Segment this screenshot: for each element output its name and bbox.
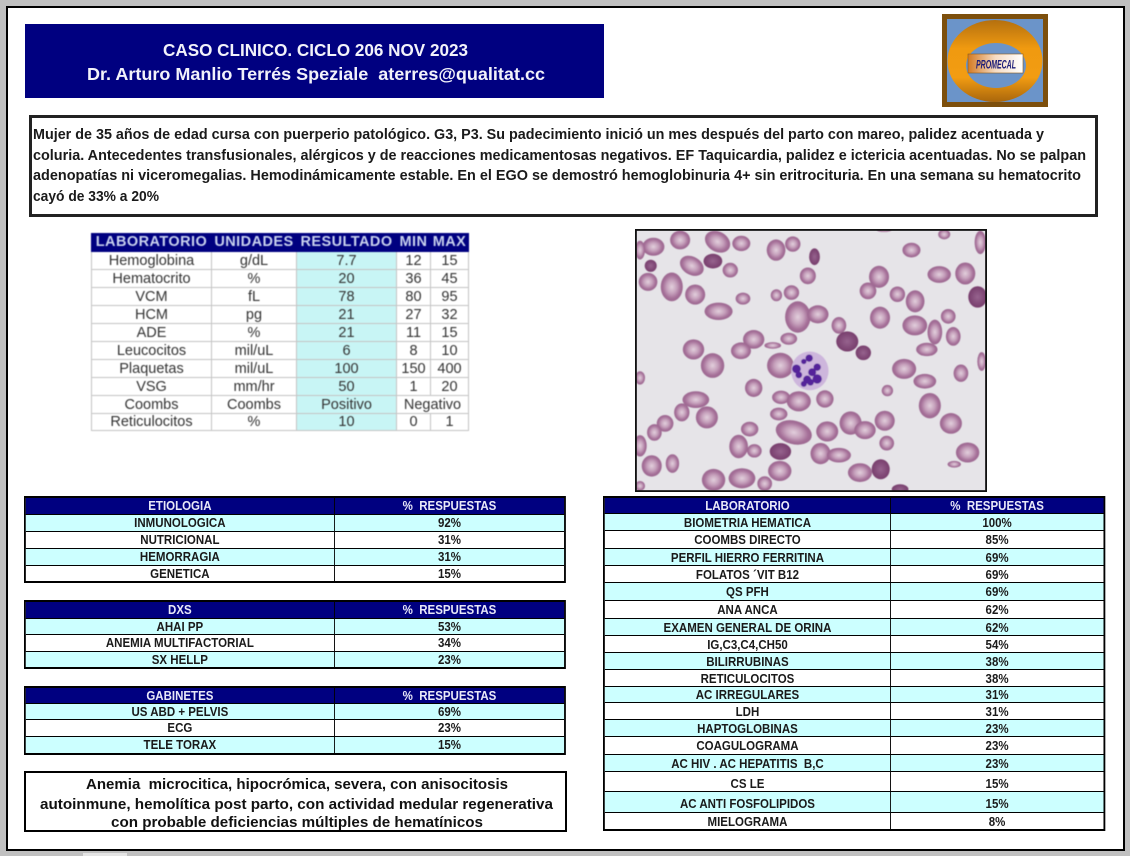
table: LABORATORIO responses: 15% [986,777,1009,791]
lab results table: Negativo [404,397,461,413]
table: GABINETES: % RESPUESTAS [403,689,496,703]
lab results table: 150 [401,361,426,377]
lab results table: 21 [338,307,355,323]
title banner: CASO CLINICO. CICLO 206 NOV 2023 [163,40,468,60]
table: LABORATORIO responses: 85% [986,533,1009,547]
table: ETIOLOGIA: 15% [438,567,461,581]
lab results table: UNIDADES [214,234,294,250]
table: DXS: % RESPUESTAS [403,603,496,617]
conclusion box: Anemia microcitica, hipocrómica, severa, con anisocitosis [86,776,508,793]
lab results table: 15 [441,325,458,341]
table: LABORATORIO responses: 38% [986,655,1009,669]
table: DXS: SX HELLP [152,653,208,667]
lab results table [90,232,470,432]
case description [29,115,1098,217]
lab results table: 20 [441,379,458,395]
lab results table: fL [248,289,260,305]
table: DXS: ANEMIA MULTIFACTORIAL [106,636,254,650]
table: DXS: 53% [438,620,461,634]
title banner: Dr. Arturo Manlio Terrés Speziale aterres@qualitat.cc [87,64,545,84]
table: LABORATORIO responses: LDH [736,705,759,719]
table: LABORATORIO responses: 31% [986,688,1009,702]
lab results table: 15 [441,253,458,269]
table: LABORATORIO responses: BIOMETRIA HEMATICA [684,516,811,530]
table: LABORATORIO responses: ANA ANCA [717,603,778,617]
conclusion box [24,771,567,832]
table: ETIOLOGIA: 31% [438,533,461,547]
table: LABORATORIO responses: % RESPUESTAS [950,499,1044,513]
lab results table: 45 [441,271,458,287]
lab results table: 50 [338,379,355,395]
lab results table: % [248,414,260,430]
lab results table: 10 [338,414,355,430]
table: LABORATORIO responses: PERFIL HIERRO FERRITINA [671,551,824,565]
icon: PROMECAL logo [942,14,1048,107]
lab results table: 7.7 [336,253,357,269]
lab results table: Reticulocitos [110,414,193,430]
lab results table: 100 [334,361,359,377]
table: LABORATORIO responses: QS PFH [726,585,769,599]
table: LABORATORIO responses: 8% [989,815,1005,829]
table: LABORATORIO responses: 69% [986,585,1009,599]
table: ETIOLOGIA: NUTRICIONAL [140,533,219,547]
table: LABORATORIO responses: 69% [986,568,1009,582]
blood smear micrograph [635,229,987,492]
lab results table: 6 [342,343,351,359]
lab results table: 12 [405,253,422,269]
lab results table: VCM [135,289,168,305]
table: DXS: 23% [438,653,461,667]
table: ETIOLOGIA: ETIOLOGIA [148,499,211,513]
table: LABORATORIO responses: 100% [982,516,1012,530]
icon: PROMECAL logo: PROMECAL [976,58,1016,72]
table: LABORATORIO responses: 69% [986,551,1009,565]
conclusion box: autoinmune, hemolítica post parto, con actividad medular regenerativa [40,796,554,813]
table: GABINETES: GABINETES [146,689,213,703]
neutrophil [791,351,829,390]
table: ETIOLOGIA: INMUNOLOGICA [134,516,226,530]
table: ETIOLOGIA: % RESPUESTAS [403,499,496,513]
lab results table: Positivo [321,397,372,413]
lab results table: 1 [445,414,454,430]
lab results table: mm/hr [233,379,275,395]
table: ETIOLOGIA: GENETICA [150,567,210,581]
table: LABORATORIO responses: RETICULOCITOS [701,672,794,686]
table: GABINETES: 69% [438,705,461,719]
table: ETIOLOGIA [24,496,566,583]
lab results table: Coombs [227,397,281,413]
table: LABORATORIO responses: IG,C3,C4,CH50 [707,638,788,652]
table: LABORATORIO responses: AC IRREGULARES [696,688,799,702]
table: LABORATORIO responses: 15% [986,797,1009,811]
table: LABORATORIO responses: 54% [986,638,1009,652]
lab results table: 1 [409,379,418,395]
case description: adenopatías ni viceromegalias. Hemodinámicamente estable. En el EGO se demostró hemoglobinuria 4+ sin eritrocituria. En una semana su hematocrito [33,167,1081,184]
lab results table: 78 [338,289,355,305]
table: LABORATORIO responses: 62% [986,603,1009,617]
table: LABORATORIO responses: LABORATORIO [705,499,790,513]
table: GABINETES: US ABD + PELVIS [131,705,228,719]
lab results table: 27 [405,307,422,323]
lab results table: 8 [409,343,418,359]
table: LABORATORIO responses: CS LE [731,777,764,791]
table: LABORATORIO responses: 31% [986,705,1009,719]
table: GABINETES: TELE TORAX [144,738,216,752]
lab results table: 36 [405,271,422,287]
lab results table: 32 [441,307,458,323]
table: LABORATORIO responses: HAPTOGLOBINAS [697,722,798,736]
table: LABORATORIO responses: EXAMEN GENERAL DE ORINA [664,621,831,635]
table: GABINETES: 15% [438,738,461,752]
lab results table: 0 [409,414,418,430]
lab results table: Coombs [124,397,178,413]
table: GABINETES [24,686,566,755]
lab results table: g/dL [240,253,268,269]
table: LABORATORIO responses: FOLATOS ´VIT B12 [696,568,799,582]
lab results table: pg [246,307,262,323]
table: DXS: 34% [438,636,461,650]
table: LABORATORIO responses: COAGULOGRAMA [696,739,799,753]
lab results table: MIN [400,234,427,250]
table: LABORATORIO responses: AC HIV . AC HEPATITIS B,C [671,757,824,771]
case description: Mujer de 35 años de edad cursa con puerperio patológico. G3, P3. Su padecimiento inició un mes después del parto con mareo, palidez acentuada y [33,126,1045,143]
table: LABORATORIO responses: MIELOGRAMA [708,815,787,829]
lab results table: 10 [441,343,458,359]
table: LABORATORIO responses [603,496,1105,831]
lab results table: Leucocitos [117,343,186,359]
table: LABORATORIO responses: 23% [986,739,1009,753]
table: ETIOLOGIA: HEMORRAGIA [140,550,220,564]
lab results table: MAX [433,234,466,250]
table: DXS [24,600,566,669]
lab results table: Hemoglobina [109,253,194,269]
lab results table: HCM [135,307,168,323]
title banner [25,24,604,98]
table: LABORATORIO responses: 62% [986,621,1009,635]
lab results table: 11 [406,325,421,341]
table: ETIOLOGIA: 92% [438,516,461,530]
lab results table: ADE [137,325,166,341]
lab results table: 21 [338,325,355,341]
table: DXS: AHAI PP [157,620,203,634]
lab results table: mil/uL [235,343,273,359]
lab results table: mil/uL [235,361,273,377]
lab results table: % [248,271,260,287]
case description: cayó de 33% a 20% [33,188,159,205]
table: GABINETES: 23% [438,721,461,735]
lab results table: Plaquetas [119,361,184,377]
lab results table: 400 [437,361,462,377]
table: LABORATORIO responses: 23% [986,757,1009,771]
lab results table: Hematocrito [112,271,191,287]
table: GABINETES: ECG [167,721,192,735]
table: LABORATORIO responses: AC ANTI FOSFOLIPIDOS [680,797,815,811]
lab results table: 80 [405,289,422,305]
table: LABORATORIO responses: 23% [986,722,1009,736]
lab results table: RESULTADO [300,234,393,250]
lab results table: LABORATORIO [96,234,207,250]
table: DXS: DXS [168,603,192,617]
bottom edge patch [83,853,127,856]
lab results table: 20 [338,271,355,287]
table: LABORATORIO responses: 38% [986,672,1009,686]
table: LABORATORIO responses: COOMBS DIRECTO [694,533,801,547]
table: LABORATORIO responses: BILIRRUBINAS [706,655,789,669]
lab results table: 95 [441,289,458,305]
table: ETIOLOGIA: 31% [438,550,461,564]
lab results table: % [248,325,260,341]
lab results table: VSG [136,379,167,395]
